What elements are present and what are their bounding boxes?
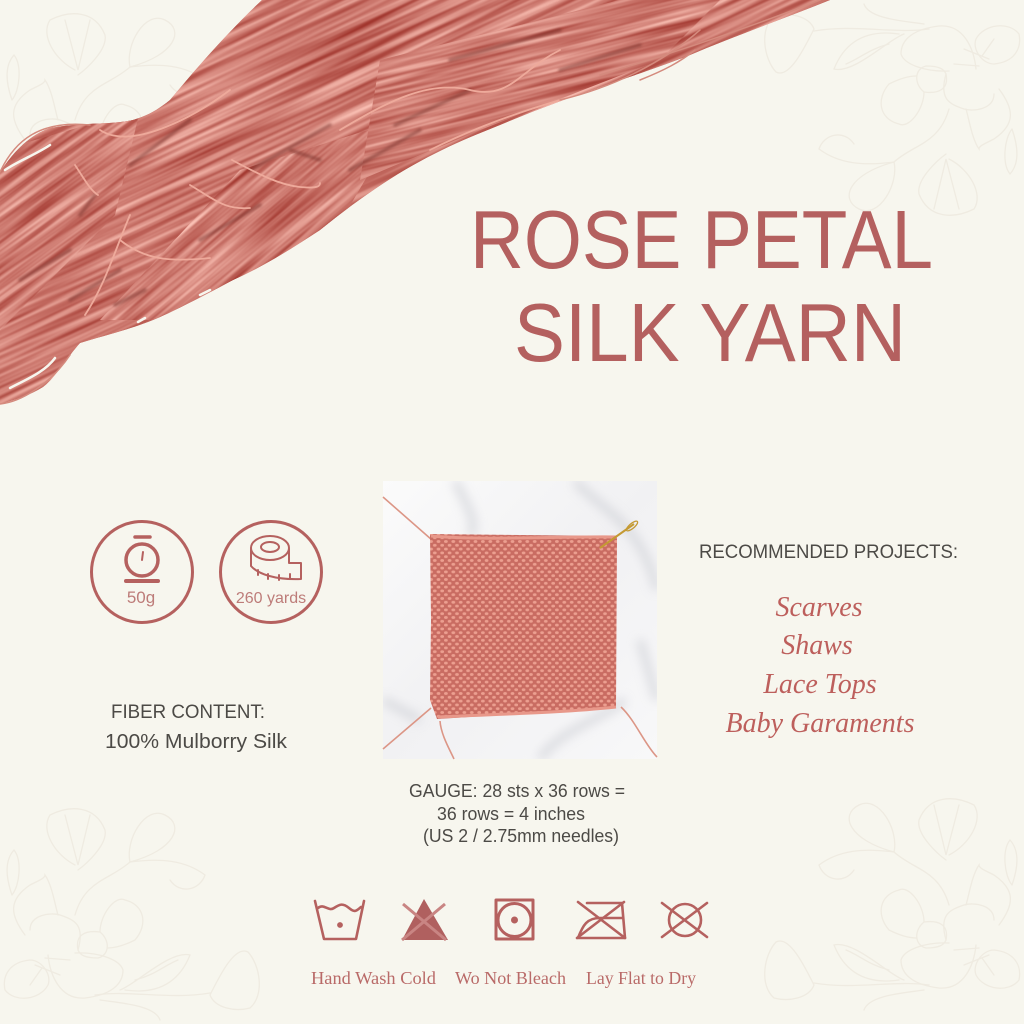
icon: hand wash — [315, 901, 364, 939]
recommended projects: Shaws — [781, 630, 853, 661]
dark creases — [20, 30, 640, 305]
weight badge — [92, 522, 192, 622]
fiber content: 100% Mulborry Silk — [105, 731, 288, 753]
gauge text: 36 rows = 4 inches — [437, 804, 585, 824]
yarn hank photo — [0, 0, 830, 405]
loose light strands — [75, 50, 560, 315]
icon: scale — [126, 537, 158, 581]
gauge text — [409, 781, 625, 846]
care labels: Wo Not Bleach — [455, 968, 566, 988]
care symbols — [311, 899, 707, 988]
care labels: Lay Flat to Dry — [586, 968, 696, 988]
icon: needle — [600, 520, 639, 548]
gauge text: GAUGE: 28 sts x 36 rows = — [409, 781, 625, 801]
care labels: Hand Wash Cold — [311, 968, 436, 988]
label: 50g: 50g — [127, 588, 155, 607]
icon: do not dry clean — [662, 903, 707, 937]
gauge swatch photo — [383, 481, 657, 759]
icon: tumble dry — [496, 900, 533, 939]
gauge text: (US 2 / 2.75mm needles) — [423, 826, 619, 846]
title — [470, 193, 933, 379]
title: ROSE PETAL — [470, 193, 933, 286]
knit square — [430, 534, 617, 719]
icon: tape measure — [251, 536, 301, 580]
title: SILK YARN — [514, 286, 906, 379]
frayed strands past the edge — [0, 0, 820, 404]
recommended projects: RECOMMENDED PROJECTS: — [699, 542, 958, 563]
length badge — [220, 522, 322, 622]
icon: lay flat crossed out — [577, 902, 625, 938]
fiber content: FIBER CONTENT: — [111, 702, 265, 723]
cloth folds — [383, 481, 657, 759]
recommended projects: Scarves — [775, 592, 863, 623]
yarn tails — [383, 497, 657, 759]
care labels — [311, 968, 696, 988]
icon: do not bleach — [402, 899, 448, 940]
fiber content — [105, 702, 288, 753]
recommended projects: Baby Garaments — [726, 708, 915, 739]
recommended projects — [699, 542, 958, 739]
label: 260 yards: 260 yards — [236, 590, 306, 607]
recommended projects: Lace Tops — [762, 669, 877, 700]
